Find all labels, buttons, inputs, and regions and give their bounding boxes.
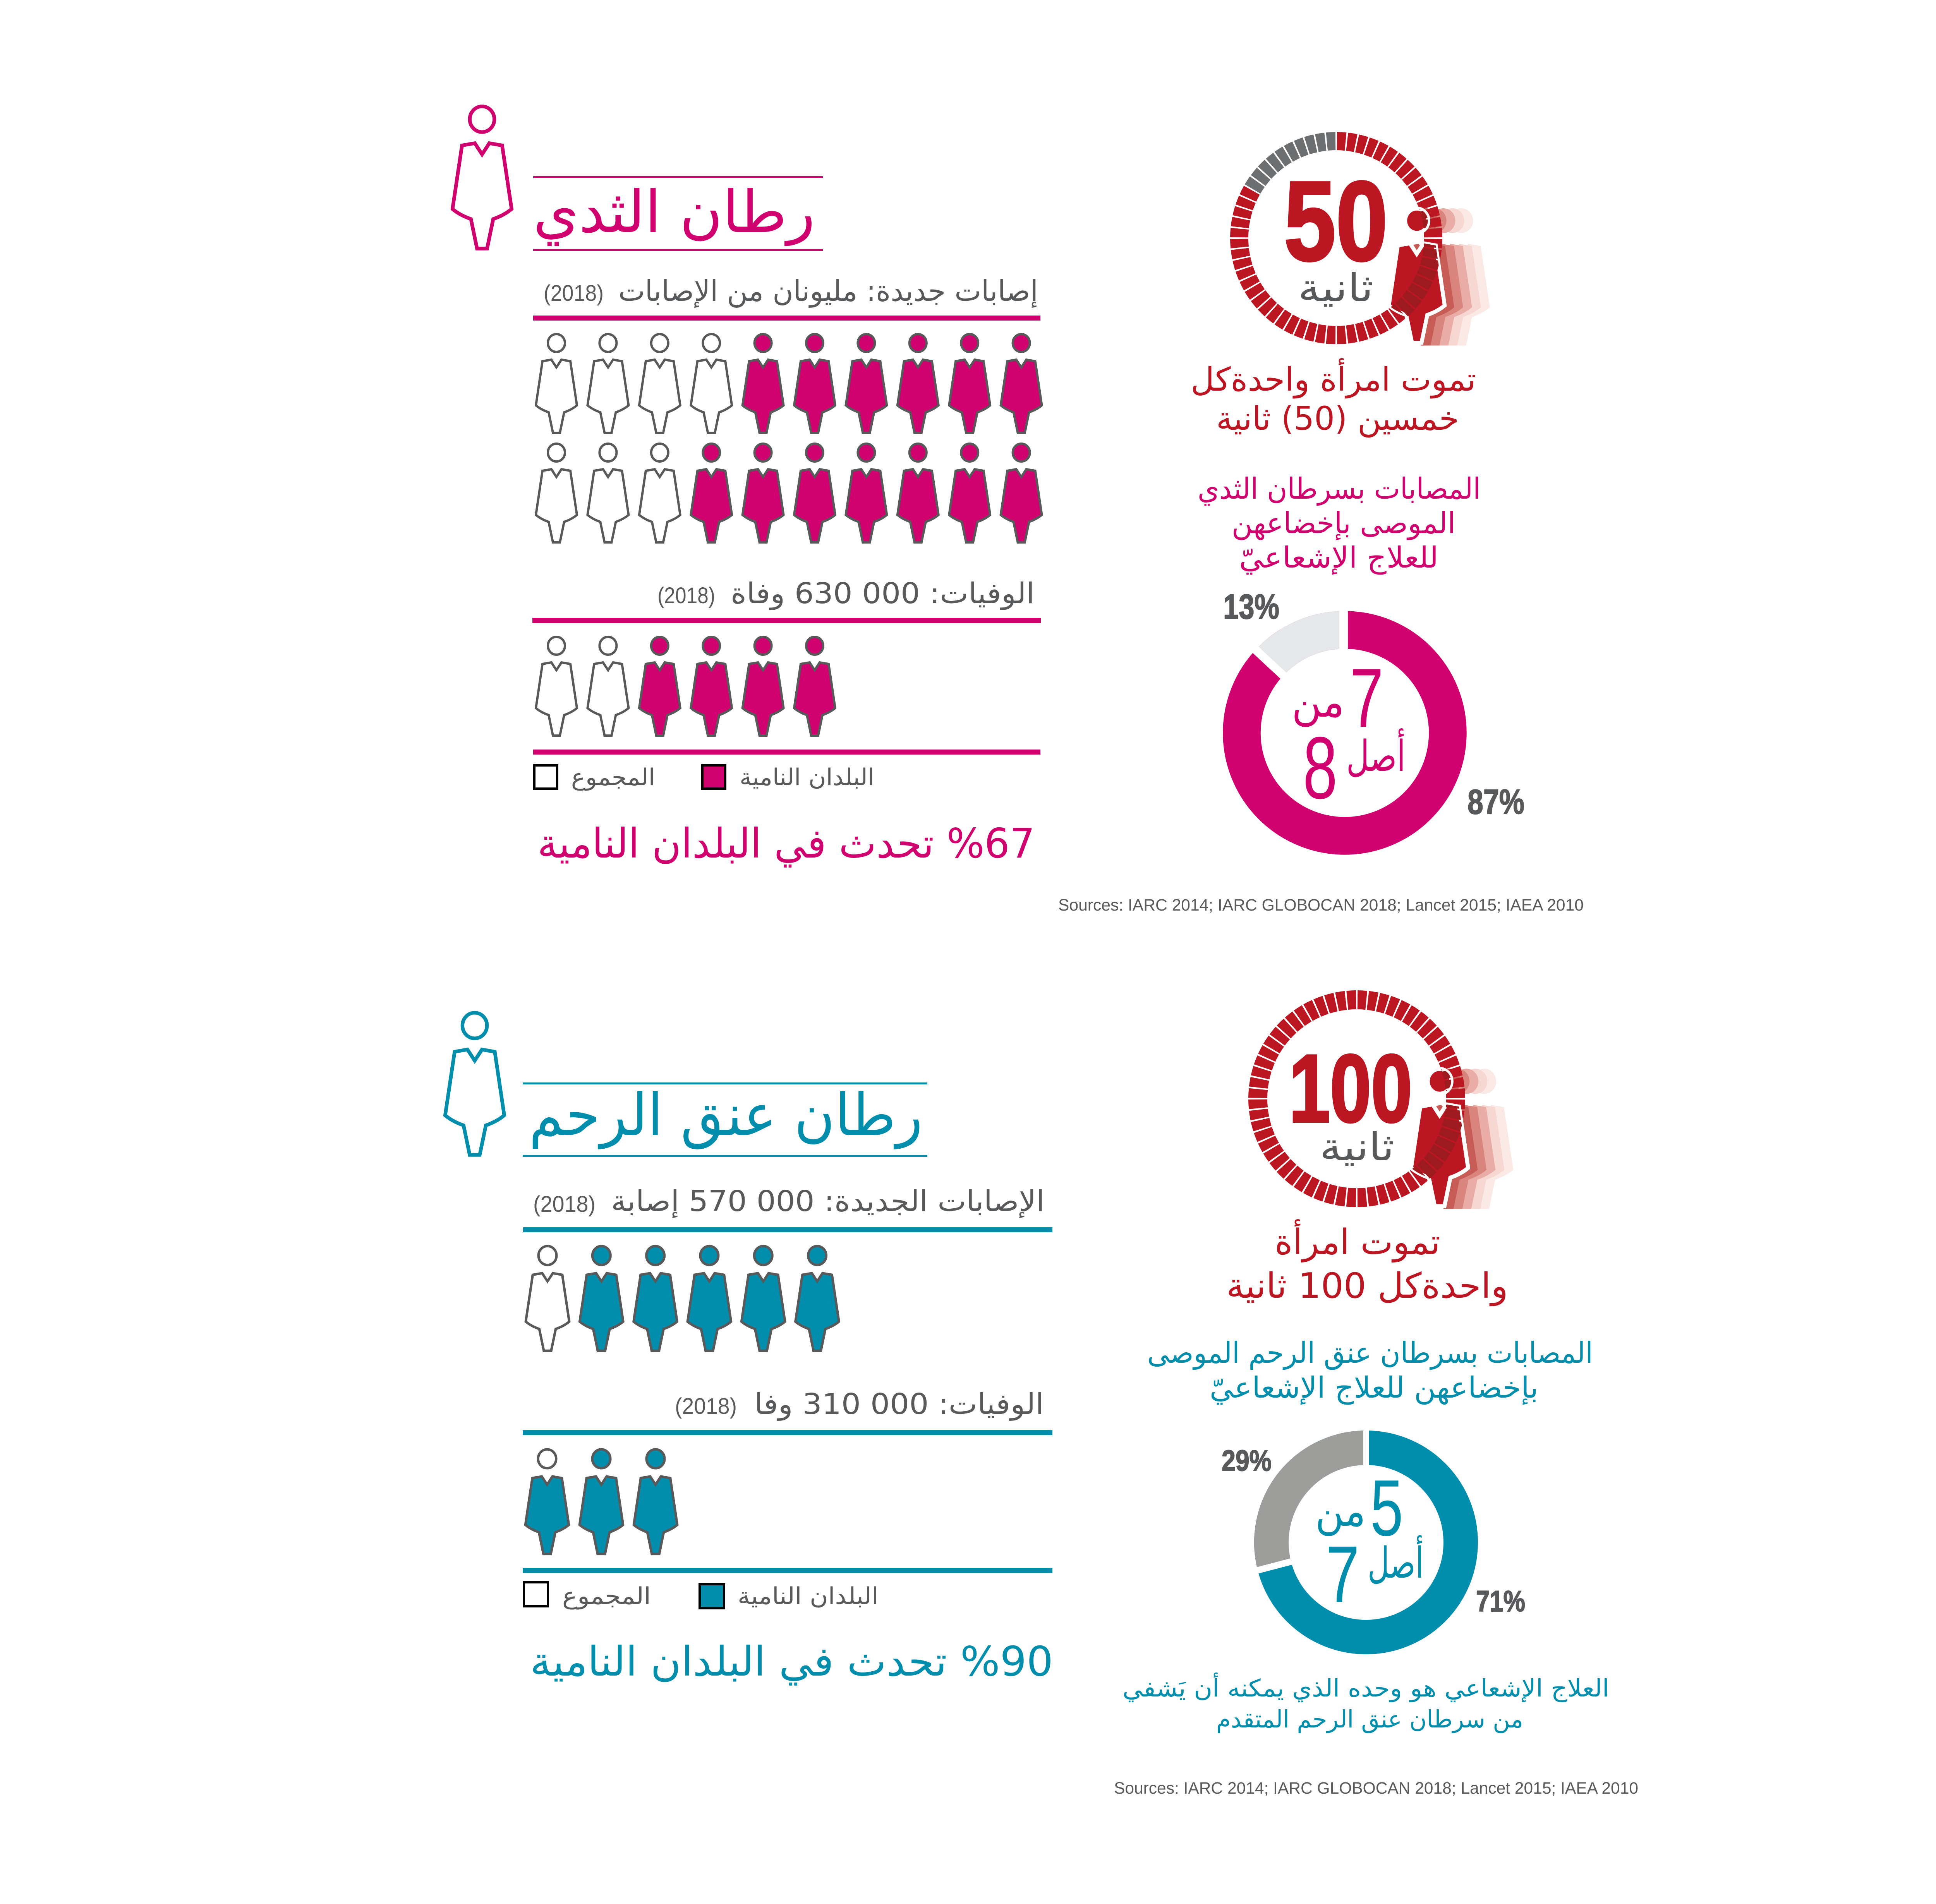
text: patients recommended radiotherapy: بإخضاعهن للعلاج الإشعاعيّ bbox=[1210, 1371, 1538, 1405]
ring of seconds bbox=[1239, 141, 1433, 335]
pictogram: deaths bbox=[525, 1449, 677, 1554]
donut: 5 of 7: 5 bbox=[1370, 1463, 1403, 1552]
text: patients recommended radiotherapy bbox=[1147, 1336, 1593, 1405]
statement: 67 percent: %67 تحدث في البلدان النامية bbox=[537, 820, 1035, 868]
heading: deaths: الوفيات: 630 000 وفاة bbox=[731, 577, 1035, 610]
legend bbox=[524, 1582, 879, 1610]
text: patients recommended radiotherapy: المصابات بسرطان عنق الرحم الموصى bbox=[1147, 1336, 1593, 1370]
text: patients recommended radiotherapy: المصابات بسرطان الثدي bbox=[1198, 472, 1481, 506]
number 100: 100 bbox=[1289, 1034, 1412, 1142]
title: رطان عنق الرحم bbox=[529, 1082, 923, 1149]
figure echoes bbox=[1397, 208, 1490, 345]
caption: one woman dies bbox=[1226, 1219, 1508, 1307]
legend: المجموع bbox=[562, 1583, 651, 1610]
donut: 5 of 7: 7 bbox=[1326, 1530, 1359, 1619]
text: patients recommended radiotherapy bbox=[1198, 472, 1481, 575]
label seconds: ثانية bbox=[1298, 265, 1373, 310]
pictogram: new cases row 1 bbox=[536, 334, 1042, 433]
pictogram: deaths bbox=[536, 637, 835, 736]
pictogram: new cases row 2 bbox=[536, 444, 1042, 542]
heading: new cases: (2018) bbox=[533, 1192, 596, 1217]
heading: new cases: إصابات جديدة: مليونان من الإصابات bbox=[618, 274, 1038, 308]
value 71 percent: 71% bbox=[1476, 1585, 1525, 1618]
note: radiotherapy alone can cure: من سرطان عنق الرحم المتقدم bbox=[1216, 1705, 1523, 1733]
value 29 percent: 29% bbox=[1222, 1444, 1272, 1477]
label seconds: ثانية bbox=[1320, 1124, 1394, 1170]
number 50: 50 bbox=[1284, 158, 1388, 284]
donut: 7 of 8: أصل bbox=[1346, 728, 1406, 781]
icon: woman outline bbox=[445, 1013, 504, 1155]
ring of seconds bbox=[1258, 1000, 1456, 1198]
donut: 7 of 8: من bbox=[1292, 677, 1344, 727]
heading: new cases: (2018) bbox=[544, 281, 604, 306]
clock: 100 seconds bbox=[1258, 1000, 1513, 1209]
pictogram: new cases bbox=[526, 1246, 839, 1351]
figure echoes bbox=[1419, 1069, 1513, 1209]
heading: new cases: الإصابات الجديدة: 570 000 إصابة bbox=[611, 1185, 1045, 1218]
caption: one woman dies bbox=[1191, 358, 1476, 438]
icon: woman outline bbox=[453, 106, 511, 249]
icon: woman bbox=[1258, 1000, 1468, 1206]
caption: one woman dies: خمسين (50) ثانية bbox=[1216, 400, 1459, 438]
donut: 5 of 7: أصل bbox=[1368, 1535, 1424, 1588]
donut: 5 of 7 bbox=[1222, 1425, 1525, 1637]
note: radiotherapy alone can cure bbox=[1122, 1672, 1609, 1733]
legend bbox=[534, 764, 874, 791]
value 87 percent: 87% bbox=[1467, 783, 1524, 822]
icon: woman bbox=[1389, 207, 1447, 345]
legend: البلدان النامية bbox=[738, 1583, 879, 1610]
title: رطان الثدي bbox=[533, 178, 815, 246]
legend: البلدان النامية bbox=[740, 764, 874, 791]
sources: Sources: IARC 2014; IARC GLOBOCAN 2018; Lancet 2015; IAEA 2010 bbox=[1114, 1779, 1638, 1798]
text: patients recommended radiotherapy: الموصى بإخضاعهن bbox=[1232, 506, 1455, 540]
panel: cervical cancer bbox=[445, 1000, 1638, 1798]
caption: one woman dies: تموت امرأة bbox=[1275, 1219, 1440, 1262]
donut: 7 of 8: 7 bbox=[1350, 651, 1383, 744]
donut: 7 of 8 bbox=[1223, 588, 1524, 836]
donut: 7 of 8: 8 bbox=[1303, 719, 1337, 817]
text: patients recommended radiotherapy: للعلاج الإشعاعيّ bbox=[1239, 540, 1438, 575]
clock: 50 seconds bbox=[1239, 141, 1490, 345]
caption: one woman dies: واحدةكل 100 ثانية bbox=[1226, 1266, 1508, 1307]
legend: المجموع bbox=[571, 764, 655, 791]
value 13 percent: 13% bbox=[1223, 588, 1279, 626]
donut: 5 of 7: من bbox=[1315, 1486, 1366, 1536]
heading: deaths: (2018) bbox=[675, 1394, 737, 1419]
panel: breast cancer bbox=[453, 106, 1584, 914]
sources: Sources: IARC 2014; IARC GLOBOCAN 2018; Lancet 2015; IAEA 2010 bbox=[1058, 896, 1584, 914]
statement: 90 percent: %90 تحدث في البلدان النامية bbox=[530, 1638, 1053, 1686]
caption: one woman dies: تموت امرأة واحدةكل bbox=[1191, 358, 1476, 399]
heading: deaths: الوفيات: 310 000 وفا bbox=[754, 1388, 1044, 1421]
note: radiotherapy alone can cure: العلاج الإشعاعي هو وحده الذي يمكنه أن يَشفي bbox=[1122, 1672, 1609, 1703]
heading: deaths: (2018) bbox=[657, 583, 715, 608]
